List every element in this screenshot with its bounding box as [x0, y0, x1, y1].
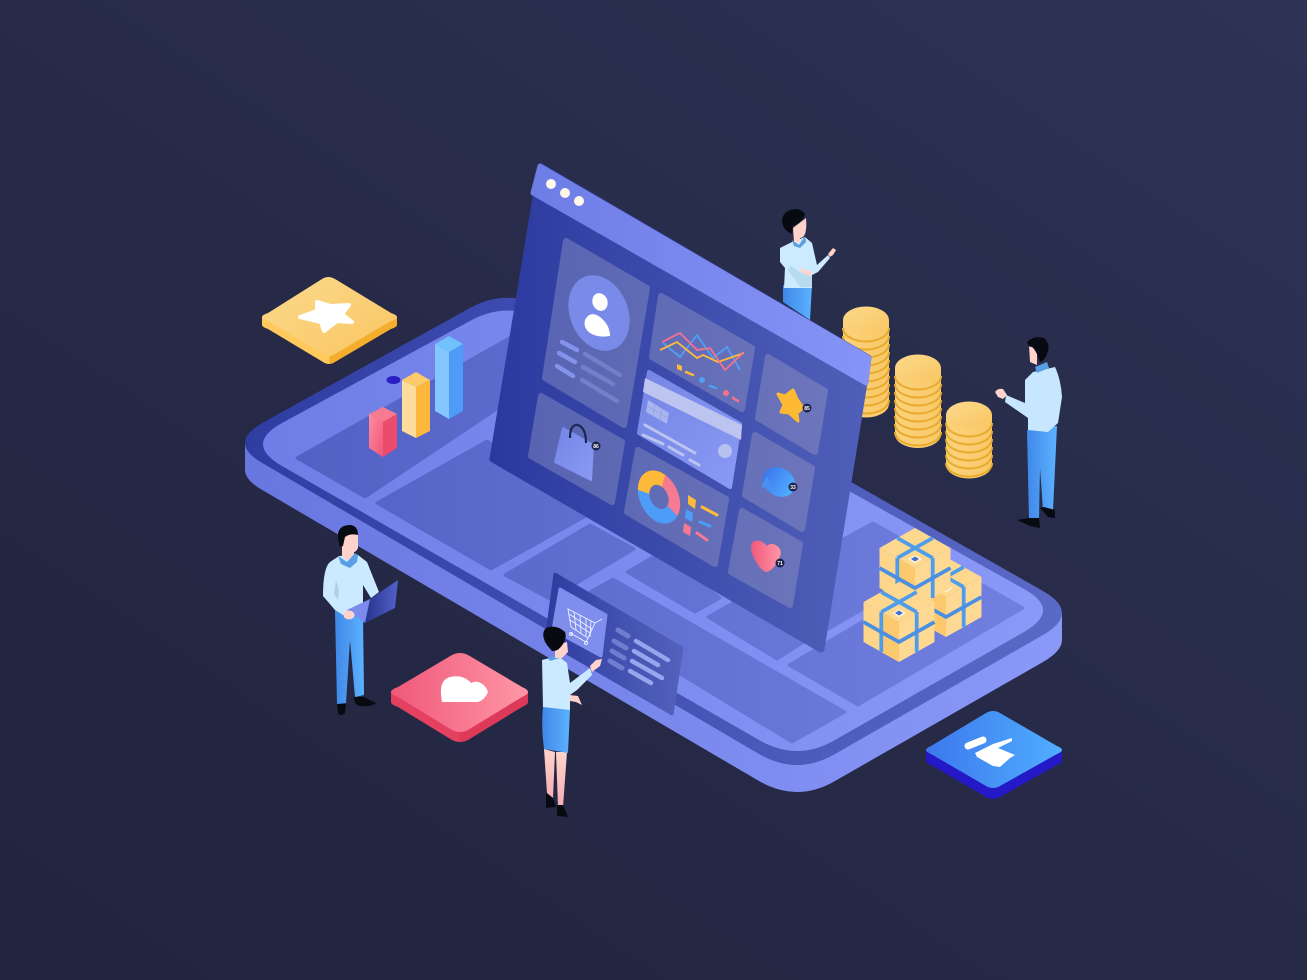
panel: credit card [639, 372, 742, 487]
panel: main dashboard screen [493, 166, 869, 649]
panel: shopping bag card [531, 396, 622, 502]
person: man looking at coins [995, 337, 1062, 528]
legs [544, 749, 555, 798]
panel: small cart screen [546, 574, 682, 714]
bar chart: 3D bars [369, 336, 463, 457]
panel: shopping bag card: 86 [593, 444, 599, 450]
icon: star [300, 302, 352, 331]
panel: line chart card [652, 296, 752, 409]
coin stack 1 [843, 306, 889, 418]
card chip [646, 400, 669, 424]
panel: star card [758, 357, 825, 452]
panel: profile card [545, 241, 647, 425]
panel: donut chart card [627, 450, 726, 564]
panel: chat card: 33 [790, 485, 796, 491]
skirt [542, 706, 570, 753]
icon: heart [441, 676, 488, 702]
tile: star [262, 277, 397, 364]
hand [344, 610, 354, 620]
tile: heart [391, 653, 528, 742]
title bar [533, 166, 869, 383]
panel: heart card: 71 [777, 561, 783, 567]
bar: red [369, 407, 397, 457]
pants [335, 610, 364, 704]
bar: yellow [402, 372, 430, 438]
shirt [542, 656, 592, 710]
laptop [347, 580, 398, 623]
head [342, 533, 358, 560]
person: man with laptop [323, 525, 398, 715]
coin stack 2 [895, 354, 941, 448]
head [555, 642, 568, 658]
icon: shopping cart [568, 609, 602, 644]
phone platform [245, 298, 1062, 792]
panel: heart card [731, 511, 800, 605]
boxes stack [864, 528, 982, 662]
bar: blue [435, 336, 463, 419]
hand [590, 659, 602, 672]
person: woman touching screen [542, 627, 602, 817]
tile: thumbs up [926, 711, 1062, 799]
phone app panels [297, 332, 1023, 742]
panel: chat card [745, 435, 812, 529]
dot marker [386, 376, 400, 384]
panel: star card: 85 [804, 406, 810, 412]
icon: thumb [968, 738, 1015, 767]
sweater [323, 555, 379, 615]
person: woman behind screen [780, 209, 836, 320]
coin stack 3 [946, 402, 992, 479]
